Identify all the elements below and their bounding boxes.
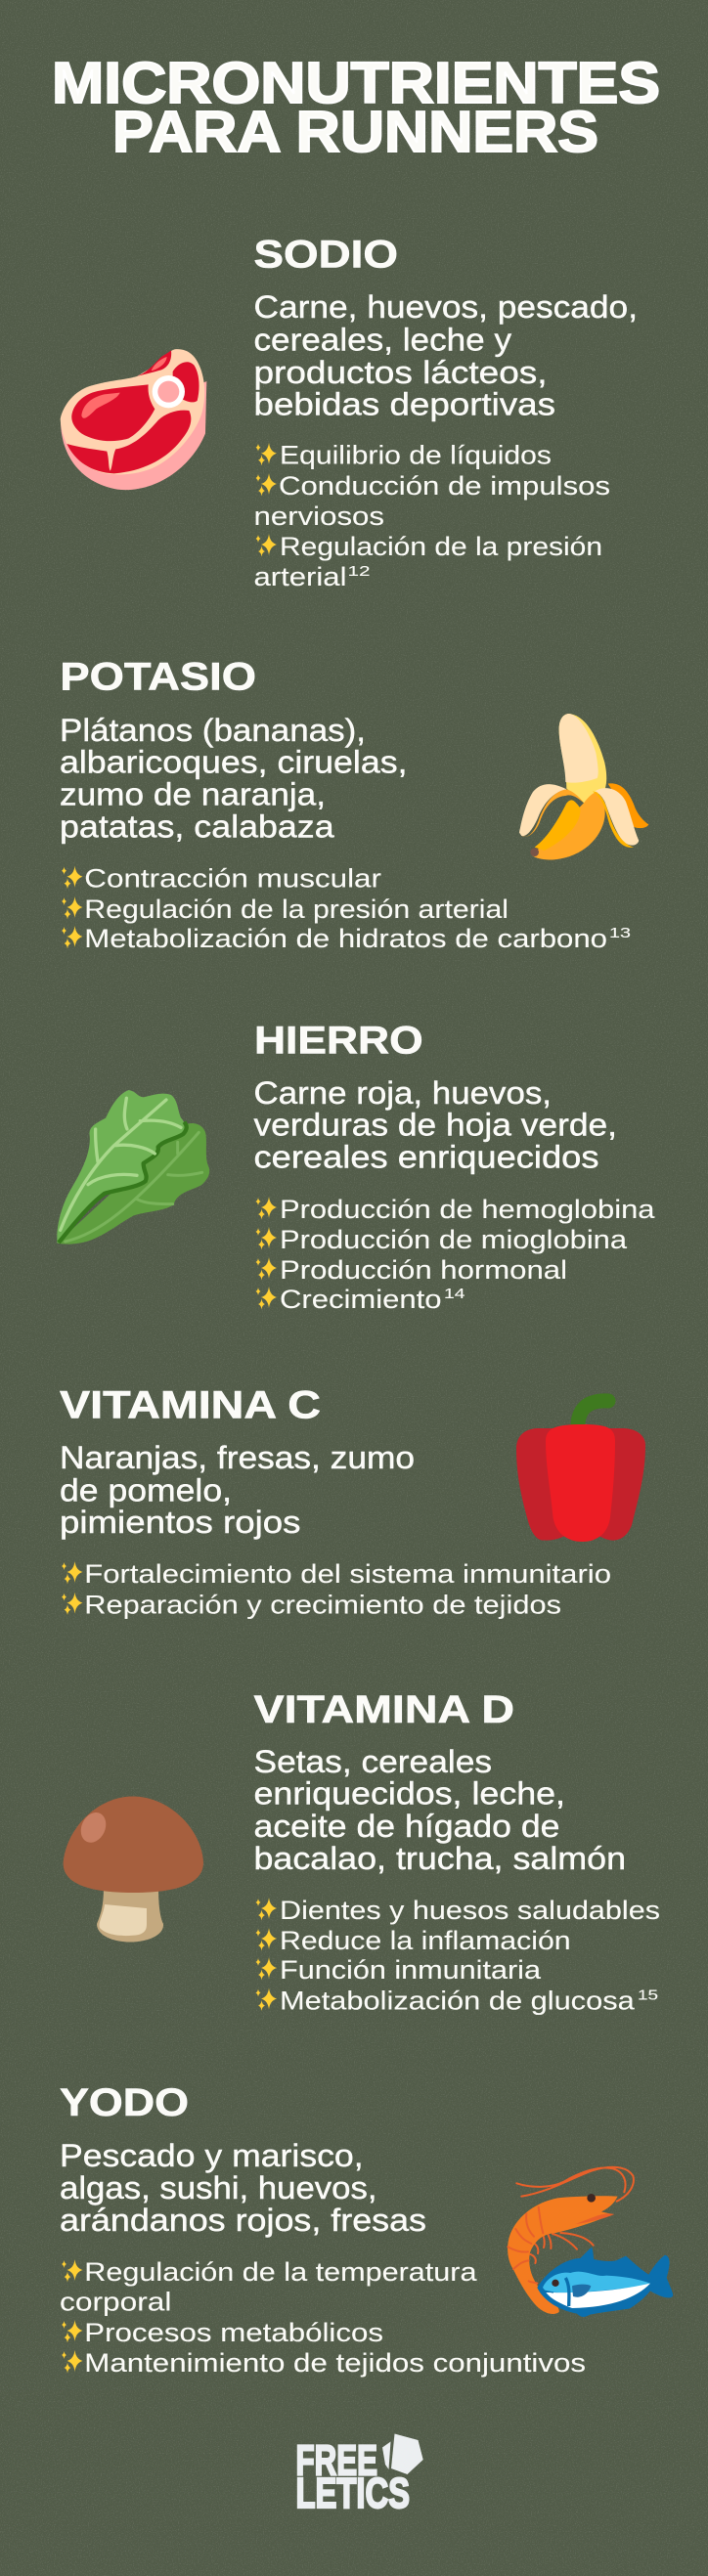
text block: hierro benefits: Producción de hemoglobina xyxy=(280,1195,655,1224)
text block: yodo benefits: Procesos metabólicos xyxy=(84,2318,383,2347)
text block: vitamina d benefits: Función inmunitaria xyxy=(280,1955,541,1985)
text block: hierro benefits xyxy=(256,1195,655,1314)
text block: vitamina d benefits: 15 xyxy=(638,1987,658,2004)
icon: red pepper xyxy=(516,1401,645,1542)
panel: vitamina c xyxy=(60,1384,645,1620)
text block: sodio benefits: 12 xyxy=(348,563,370,580)
heading: yodo: YODO xyxy=(60,2081,189,2124)
text block: vitamina d foods: aceite de hígado de xyxy=(254,1809,559,1844)
panel: potasio xyxy=(60,656,648,953)
text block: vitamina d foods xyxy=(254,1744,626,1876)
icon: leafy greens xyxy=(57,1090,209,1244)
text block: vitamina d benefits: Dientes y huesos saludables xyxy=(280,1896,660,1925)
text block: yodo benefits: corporal xyxy=(60,2288,171,2317)
text block: yodo foods xyxy=(60,2138,426,2238)
title: PARA RUNNERS xyxy=(112,100,598,164)
text block: hierro foods xyxy=(254,1075,617,1175)
heading: vitamina c: VITAMINA C xyxy=(60,1384,321,1427)
text block: yodo benefits xyxy=(60,2257,586,2378)
panel: vitamina d xyxy=(64,1688,660,2016)
text block: potasio foods: zumo de naranja, xyxy=(60,777,326,812)
text block: hierro foods: Carne roja, huevos, xyxy=(254,1075,552,1111)
heading: hierro: HIERRO xyxy=(254,1019,423,1062)
text block: sodio foods: bebidas deportivas xyxy=(254,387,555,422)
text block: potasio benefits: Contracción muscular xyxy=(84,864,381,894)
text block: potasio benefits: 13 xyxy=(609,925,631,941)
text block: yodo foods: algas, sushi, huevos, xyxy=(60,2170,377,2205)
text block: vitamina d foods: Setas, cereales xyxy=(254,1744,492,1779)
icon: meat xyxy=(61,349,206,490)
text block: vitamina c foods: de pomelo, xyxy=(60,1472,232,1507)
text block: sodio foods: Carne, huevos, pescado, xyxy=(254,289,638,325)
text block: vitamina d foods: enriquecidos, leche, xyxy=(254,1776,565,1812)
text block: vitamina c foods: Naranjas, fresas, zumo xyxy=(60,1440,415,1475)
panel: sodio xyxy=(61,233,638,591)
text block: hierro benefits: 14 xyxy=(444,1286,465,1302)
text block: vitamina c benefits: Reparación y crecimiento de tejidos xyxy=(84,1591,561,1620)
title: MICRONUTRIENTES xyxy=(52,51,660,115)
text block: hierro benefits: Producción hormonal xyxy=(280,1255,567,1285)
logo: freeletics: FREE xyxy=(295,2438,377,2485)
text block: hierro foods: verduras de hoja verde, xyxy=(254,1108,617,1143)
text block: sodio benefits: nerviosos xyxy=(254,502,384,531)
text block: vitamina d benefits xyxy=(256,1896,660,2016)
heading: potasio: POTASIO xyxy=(60,656,256,699)
heading: sodio: SODIO xyxy=(254,233,398,276)
panel: hierro xyxy=(57,1019,655,1314)
text block: sodio benefits: Equilibrio de líquidos xyxy=(280,441,552,470)
text block: potasio benefits: Metabolización de hidratos de carbono xyxy=(84,924,607,953)
panel: yodo xyxy=(60,2081,673,2378)
text block: potasio foods: Plátanos (bananas), xyxy=(60,713,366,748)
icon: mushroom xyxy=(64,1797,203,1942)
text block: hierro benefits: Producción de mioglobina xyxy=(280,1225,627,1254)
text block: potasio foods: albaricoques, ciruelas, xyxy=(60,745,407,780)
text block: potasio foods xyxy=(60,713,407,845)
text block: vitamina d benefits: Metabolización de glucosa xyxy=(280,1987,635,2016)
heading: vitamina d: VITAMINA D xyxy=(254,1688,514,1731)
text block: yodo benefits: Regulación de la temperatura xyxy=(84,2257,477,2287)
text block: hierro foods: cereales enriquecidos xyxy=(254,1140,598,1175)
logo: freeletics xyxy=(295,2434,423,2517)
text block: sodio foods: productos lácteos, xyxy=(254,355,548,390)
text block: yodo foods: Pescado y marisco, xyxy=(60,2138,364,2173)
text block: sodio benefits: Conducción de impulsos xyxy=(279,471,610,501)
text block: sodio benefits: arterial xyxy=(254,562,346,591)
text block: hierro benefits: Crecimiento xyxy=(280,1285,442,1314)
text block: vitamina c benefits xyxy=(62,1559,611,1620)
logo: freeletics: LETICS xyxy=(295,2470,410,2517)
text block: vitamina c foods: pimientos rojos xyxy=(60,1505,301,1540)
icon: banana xyxy=(519,714,648,859)
text block: potasio benefits xyxy=(62,864,631,953)
text block: sodio foods: cereales, leche y xyxy=(254,322,511,357)
text block: vitamina c benefits: Fortalecimiento del sistema inmunitario xyxy=(84,1559,611,1589)
text block: sodio benefits xyxy=(254,441,610,591)
text block: vitamina c foods xyxy=(60,1440,415,1540)
text block: sodio foods xyxy=(254,289,638,422)
text block: yodo foods: arándanos rojos, fresas xyxy=(60,2203,426,2238)
text block: yodo benefits: Mantenimiento de tejidos conjuntivos xyxy=(84,2348,586,2378)
text block: vitamina d foods: bacalao, trucha, salmón xyxy=(254,1841,626,1876)
icon: shrimp and fish xyxy=(508,2167,673,2317)
text block: potasio benefits: Regulación de la presión arterial xyxy=(84,895,509,924)
text block: vitamina d benefits: Reduce la inflamación xyxy=(280,1926,571,1955)
text block: potasio foods: patatas, calabaza xyxy=(60,809,334,845)
title xyxy=(52,51,660,164)
text block: sodio benefits: Regulación de la presión xyxy=(280,532,602,561)
